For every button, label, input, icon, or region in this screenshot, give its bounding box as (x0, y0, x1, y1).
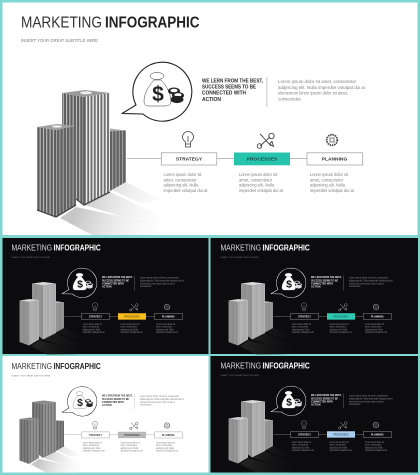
item descriptions: imperdiet volutpat dui at (292, 331, 314, 334)
body paragraph: Lorem ipsum dolor sit amet, consectetur (349, 276, 388, 280)
box: processes: PROCESSES (124, 315, 140, 318)
body paragraph: consectetur (278, 96, 301, 102)
title: MARKETING (220, 362, 261, 371)
box: strategy: STRATEGY (89, 315, 102, 318)
headline text (102, 394, 133, 407)
item descriptions: Lorem ipsum dolor sit (365, 323, 384, 326)
title: INFOGRAPHIC (54, 362, 101, 371)
headline text: CONNECTED WITH (102, 281, 124, 285)
body paragraph: adipiscing elit. Nulla imperdiet volutpat dui at (349, 279, 393, 282)
item descriptions: Lorem ipsum dolor sit (330, 323, 349, 326)
box: strategy: STRATEGY (298, 315, 311, 318)
box: planning (154, 313, 182, 320)
title: MARKETING (12, 362, 52, 371)
text: planning: Lorem ipsum dolor sit (310, 172, 349, 178)
body paragraph: elementum lorem ipsum dolor sit amet, (349, 400, 384, 403)
item descriptions: adipiscing elit. Nulla (330, 446, 348, 449)
headline text: CONNECTED WITH (202, 91, 246, 97)
item descriptions: Lorem ipsum dolor sit (292, 323, 311, 326)
box: strategy (82, 432, 109, 438)
headline text: WE LERN FROM THE BEST, (102, 394, 133, 398)
speech balloon with money bag (62, 387, 97, 416)
box: planning: PLANNING (371, 315, 384, 318)
text: planning (310, 172, 355, 194)
item descriptions: adipiscing elit. Nulla (292, 328, 310, 331)
text: strategy: imperdiet volutpat dui at (164, 188, 208, 194)
body paragraph: elementum lorem ipsum dolor sit amet, (140, 282, 175, 285)
item descriptions: imperdiet volutpat dui at (365, 449, 387, 452)
item descriptions: imperdiet volutpat dui at (120, 449, 143, 452)
headline text: CONNECTED WITH (102, 400, 124, 404)
item descriptions: Lorem ipsum dolor sit (156, 323, 175, 326)
headline text: WE LERN FROM THE BEST, (311, 393, 342, 397)
speech balloon with money bag: $ (286, 278, 292, 290)
building shadows (31, 328, 90, 354)
icon: gear (164, 423, 170, 428)
body paragraph: Lorem ipsum dolor sit amet, consectetur (349, 394, 388, 398)
box: planning: PLANNING (162, 434, 175, 437)
icon: tools (130, 304, 138, 311)
body paragraph: adipiscing elit. Nulla imperdiet volutpat dui at (349, 397, 393, 400)
headline text: CONNECTED WITH (311, 399, 333, 403)
item descriptions: imperdiet volutpat dui at (292, 449, 314, 452)
item descriptions: amet, consectetur (365, 444, 382, 447)
headline text: SUCCESS SEEMS TO BE (202, 85, 256, 91)
item descriptions: amet, consectetur (120, 444, 137, 447)
body paragraph (349, 276, 393, 288)
icon: gear (327, 135, 337, 145)
panel: dark slide teal (210, 238, 418, 354)
item descriptions: imperdiet volutpat dui at (83, 331, 105, 334)
building shadows (240, 446, 299, 472)
icon: tools (257, 133, 274, 148)
box: planning (307, 153, 363, 165)
building shadows (240, 328, 299, 354)
text: processes (239, 172, 284, 194)
box: processes: PROCESSES (333, 315, 349, 318)
speech balloon with money bag (271, 268, 306, 298)
item descriptions: imperdiet volutpat dui at (330, 331, 352, 334)
box: planning (154, 432, 182, 438)
text: processes: imperdiet volutpat dui at (239, 188, 284, 194)
box: strategy: STRATEGY (298, 433, 311, 436)
item descriptions: amet, consectetur (292, 444, 308, 447)
item descriptions: amet, consectetur (292, 326, 308, 329)
box: planning: PLANNING (322, 157, 347, 163)
icon: tools (339, 304, 347, 311)
item descriptions: adipiscing elit. Nulla (292, 446, 310, 449)
item descriptions: adipiscing elit. Nulla (83, 447, 101, 450)
text: strategy: adipiscing elit. Nulla (164, 183, 199, 189)
item descriptions: adipiscing elit. Nulla (120, 328, 139, 331)
body paragraph: adipiscing elit. Nulla imperdiet volutpat dui at (140, 279, 184, 282)
headline text: ACTION (102, 403, 112, 407)
text: strategy: amet, consectetur (164, 177, 197, 183)
text: planning: adipiscing elit. Nulla (310, 183, 345, 189)
box: processes: PROCESSES (247, 157, 278, 163)
icon: light bulb (182, 132, 194, 147)
speech balloon with money bag (122, 62, 192, 121)
item descriptions: Lorem ipsum dolor sit (83, 442, 102, 444)
title: INFOGRAPHIC (262, 244, 310, 253)
item descriptions: amet, consectetur (156, 444, 173, 447)
headline text: ACTION (102, 284, 112, 288)
icon: gear (373, 304, 379, 310)
icon: light bulb (92, 421, 98, 429)
item descriptions: imperdiet volutpat dui at (156, 449, 178, 452)
title: INFOGRAPHIC (262, 362, 310, 371)
headline text: WE LERN FROM THE BEST, (202, 78, 263, 84)
icon: light bulb (92, 303, 98, 310)
item descriptions: Lorem ipsum dolor sit (120, 323, 140, 326)
text: processes: adipiscing elit. Nulla (239, 183, 274, 189)
buildings illustration (20, 282, 64, 346)
body paragraph: Lorem ipsum dolor sit amet, consectetur (278, 79, 356, 85)
item descriptions: amet, consectetur (156, 326, 173, 329)
body paragraph: elementum lorem ipsum dolor sit amet, (140, 401, 175, 404)
item descriptions: Lorem ipsum dolor sit (83, 323, 102, 326)
body paragraph (278, 79, 366, 102)
speech balloon with money bag (271, 386, 306, 416)
speech balloon with money bag: $ (286, 396, 292, 408)
subtitle: INSERT YOUR GREAT SUBTITLE HERE (21, 38, 98, 43)
box: strategy: STRATEGY (176, 157, 203, 163)
headline text: WE LERN FROM THE BEST, (311, 275, 342, 279)
icon: tools (130, 422, 138, 430)
speech balloon with money bag: $ (77, 397, 83, 409)
box: strategy (291, 431, 318, 438)
item descriptions: adipiscing elit. Nulla (365, 446, 383, 449)
box: strategy (291, 313, 318, 320)
item descriptions: Lorem ipsum dolor sit (120, 442, 140, 444)
text: strategy: Lorem ipsum dolor sit (164, 172, 202, 178)
headline text: ACTION (311, 284, 321, 288)
box: processes: PROCESSES (124, 434, 140, 437)
title: MARKETING (21, 14, 102, 31)
body paragraph: adipiscing elit. Nulla imperdiet volutpat dui at (140, 398, 184, 401)
panel: dark slide yellow (2, 238, 208, 354)
body paragraph: elementum lorem ipsum dolor sit amet, (278, 91, 348, 97)
item descriptions: adipiscing elit. Nulla (156, 328, 174, 331)
title: MARKETING (12, 244, 52, 253)
item descriptions: Lorem ipsum dolor sit (292, 441, 311, 444)
subtitle: INSERT YOUR GREAT SUBTITLE HERE (12, 374, 51, 378)
headline text: CONNECTED WITH (311, 281, 333, 285)
item descriptions: amet, consectetur (330, 444, 346, 447)
box: processes (234, 152, 290, 165)
body paragraph: Lorem ipsum dolor sit amet, consectetur (140, 395, 179, 398)
subtitle: INSERT YOUR GREAT SUBTITLE HERE (12, 256, 51, 259)
box: strategy: STRATEGY (89, 434, 102, 437)
body paragraph: consectetur (140, 285, 152, 288)
item descriptions: adipiscing elit. Nulla (83, 328, 101, 331)
body paragraph: consectetur (349, 403, 361, 406)
box: processes (327, 431, 355, 438)
body paragraph: Lorem ipsum dolor sit amet, consectetur (140, 276, 179, 280)
speech balloon with money bag: $ (77, 278, 83, 290)
subtitle: INSERT YOUR GREAT SUBTITLE HERE (220, 256, 260, 259)
item descriptions: Lorem ipsum dolor sit (156, 442, 175, 444)
text: strategy (164, 172, 208, 194)
headline text: SUCCESS SEEMS TO BE (102, 397, 129, 401)
box: planning (364, 313, 391, 320)
building shadows (31, 446, 90, 473)
body paragraph: consectetur (140, 404, 152, 407)
headline text (102, 275, 133, 288)
title: MARKETING (220, 244, 261, 253)
item descriptions: imperdiet volutpat dui at (83, 449, 105, 452)
text: processes: amet, consectetur (239, 177, 272, 183)
box: processes (118, 432, 146, 438)
body paragraph (140, 395, 184, 407)
item descriptions: imperdiet volutpat dui at (330, 449, 352, 452)
box: processes (327, 313, 355, 320)
box: strategy (161, 153, 217, 165)
body paragraph: elementum lorem ipsum dolor sit amet, (349, 282, 384, 285)
buildings illustration (20, 400, 64, 464)
building shadows (60, 182, 178, 235)
item descriptions: amet, consectetur (365, 326, 382, 329)
body paragraph: consectetur (349, 285, 361, 288)
item descriptions: imperdiet volutpat dui at (365, 331, 387, 334)
box: planning: PLANNING (371, 433, 384, 436)
buildings illustration (37, 90, 126, 217)
headline text (202, 78, 263, 103)
headline text: SUCCESS SEEMS TO BE (102, 278, 129, 282)
text: planning: amet, consectetur (310, 177, 343, 183)
icon: tools (339, 422, 347, 429)
icon: gear (373, 422, 379, 428)
item descriptions: amet, consectetur (83, 326, 99, 329)
box: planning: PLANNING (162, 315, 175, 318)
buildings illustration (228, 400, 273, 464)
text: processes: Lorem ipsum dolor sit (239, 172, 278, 178)
box: processes (118, 313, 146, 320)
headline text: SUCCESS SEEMS TO BE (311, 278, 338, 282)
item descriptions (83, 442, 178, 452)
item descriptions: adipiscing elit. Nulla (120, 447, 139, 450)
item descriptions: amet, consectetur (83, 444, 99, 447)
headline text: ACTION (311, 402, 321, 406)
box: planning (364, 431, 391, 438)
item descriptions (292, 441, 387, 452)
box: processes: PROCESSES (333, 433, 349, 436)
item descriptions: imperdiet volutpat dui at (120, 331, 143, 334)
item descriptions: amet, consectetur (330, 326, 346, 329)
speech balloon with money bag (62, 268, 97, 298)
text: planning: imperdiet volutpat dui at (310, 188, 355, 194)
title: INFOGRAPHIC (54, 244, 101, 253)
item descriptions: adipiscing elit. Nulla (156, 447, 174, 450)
headline text (311, 275, 342, 288)
headline text: WE LERN FROM THE BEST, (102, 275, 133, 279)
item descriptions (292, 323, 387, 334)
body paragraph (140, 276, 184, 288)
icon: light bulb (301, 303, 307, 310)
item descriptions: Lorem ipsum dolor sit (365, 441, 384, 444)
title: INFOGRAPHIC (105, 14, 200, 31)
headline text: ACTION (202, 97, 221, 103)
item descriptions: amet, consectetur (120, 326, 137, 329)
item descriptions: imperdiet volutpat dui at (156, 331, 178, 334)
headline text: SUCCESS SEEMS TO BE (311, 396, 338, 400)
headline text (311, 393, 342, 406)
body paragraph: adipiscing elit. Nulla imperdiet volutpat dui at (278, 85, 366, 91)
box: strategy (82, 313, 109, 320)
panel: main white slide (2, 2, 418, 235)
item descriptions: adipiscing elit. Nulla (365, 328, 383, 331)
item descriptions: Lorem ipsum dolor sit (330, 441, 349, 444)
item descriptions: adipiscing elit. Nulla (330, 328, 348, 331)
subtitle: INSERT YOUR GREAT SUBTITLE HERE (220, 374, 260, 377)
panel: dark slide blue (210, 356, 418, 472)
icon: gear (164, 304, 170, 310)
body paragraph (349, 394, 393, 406)
speech balloon with money bag: $ (152, 83, 164, 106)
panel: light slide gray (2, 356, 208, 473)
icon: light bulb (301, 421, 307, 428)
buildings illustration (228, 282, 273, 346)
item descriptions (83, 323, 178, 334)
